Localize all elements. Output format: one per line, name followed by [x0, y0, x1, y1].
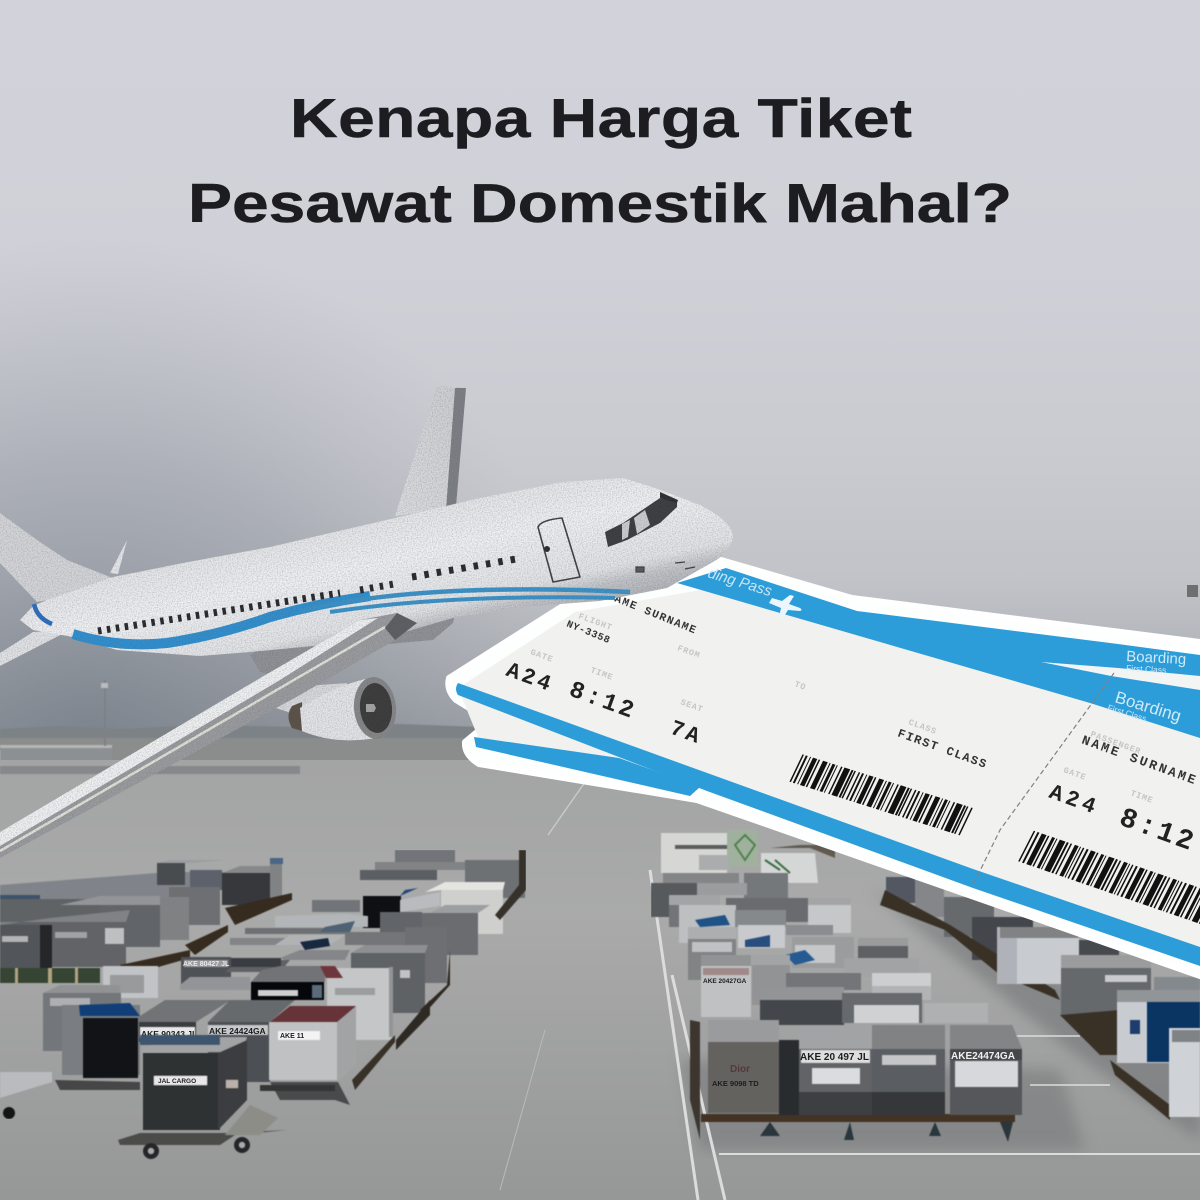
barcode: stub — [1026, 846, 1200, 909]
title: Pesawat Domestik Mahal? — [188, 172, 1012, 234]
main ticket passenger details: CLASS — [907, 717, 938, 737]
stub header text — [1106, 648, 1187, 726]
left container labels: AKE 90343 JL — [141, 1029, 197, 1039]
boarding passes — [448, 560, 1200, 976]
engine — [288, 675, 399, 741]
main ticket passenger details: TIME — [589, 665, 615, 683]
band title: boarding pass: ding Pass — [706, 565, 774, 600]
right container labels: AKE 20 497 JL — [800, 1052, 869, 1063]
right container labels: AKE 20427GA — [703, 978, 747, 985]
background: airport apron — [0, 760, 1200, 1200]
lower stabilizer — [0, 630, 70, 666]
title: Kenapa Harga Tiket — [290, 87, 912, 149]
title — [188, 87, 1012, 234]
passenger windows — [98, 559, 516, 631]
main ticket passenger details — [503, 594, 989, 772]
background: distant horizon and terminal building — [0, 680, 480, 762]
fuselage — [20, 478, 733, 656]
stub passenger details: TIME — [1129, 788, 1155, 806]
stub header text: Boarding — [1126, 648, 1187, 668]
main ticket passenger details: FLIGHT — [577, 611, 614, 633]
ticket sticker outline — [448, 560, 1200, 976]
small rear stabilizer tip — [110, 540, 127, 574]
left container labels: AKE 11 — [280, 1033, 304, 1040]
main ticket bottom band — [456, 683, 1200, 966]
cargo container with JAL Cargo label and cart — [118, 1035, 287, 1159]
left container labels: AKE 80427 JL — [183, 961, 230, 968]
tail cone blue ring — [34, 604, 52, 624]
vertical tail fin — [395, 386, 466, 516]
stub passenger details: A24 — [1046, 780, 1103, 821]
right container labels: Dior — [730, 1064, 750, 1075]
stub passenger details: NAME SURNAME — [1080, 733, 1200, 789]
background: overcast sky — [0, 0, 1200, 750]
main ticket passenger details: FROM — [676, 643, 702, 661]
white wedge of rear ticket — [1041, 662, 1200, 690]
main ticket passenger details: NY-3358 — [565, 620, 611, 647]
stub passenger details: PASSENGER — [1089, 729, 1142, 757]
main ticket passenger details: 8:12 — [565, 677, 640, 726]
JAL Cargo label: JAL CARGO — [158, 1078, 196, 1085]
stub passenger details: 8:12 — [1115, 803, 1200, 860]
perforation line — [973, 673, 1114, 885]
cargo containers: left cluster — [0, 850, 526, 1119]
cockpit windows — [605, 492, 678, 547]
engine pylon — [267, 683, 352, 716]
stub passenger details — [1046, 729, 1200, 860]
cargo containers: right cluster — [651, 830, 1200, 1142]
right container labels: AKE 9098 TD — [712, 1079, 759, 1088]
ticket top blue band — [677, 568, 1200, 738]
rear ticket bottom band — [474, 737, 700, 796]
stub header text: First Class — [1126, 663, 1167, 675]
apron marking lines — [650, 870, 1200, 1200]
main ticket passenger details: GATE — [529, 647, 555, 665]
icon: small plane — [769, 595, 802, 618]
right container labels — [703, 978, 1015, 1088]
rear stabilizer — [0, 513, 125, 602]
main ticket passenger details: SEAT — [679, 697, 705, 715]
barcode: main ticket — [796, 768, 968, 822]
main ticket passenger details: TO — [793, 679, 807, 693]
door window — [544, 546, 550, 552]
main wing — [0, 613, 417, 858]
left container labels — [141, 961, 304, 1040]
left container labels: AKE 24424GA — [209, 1026, 266, 1036]
main ticket passenger details: A24 — [503, 658, 557, 698]
fuselage blue stripe — [73, 589, 630, 644]
ticket body tint — [458, 590, 1200, 965]
airplane — [0, 386, 733, 858]
forward door — [538, 518, 580, 582]
main ticket passenger details: 7A — [667, 716, 706, 751]
main ticket passenger details: FIRST CLASS — [896, 727, 989, 772]
right container labels: AKE24474GA — [951, 1051, 1015, 1062]
wing box under belly — [250, 600, 458, 680]
stub header text: Boarding — [1113, 688, 1183, 726]
nose details — [636, 562, 695, 572]
lamp post at right edge — [1187, 585, 1198, 597]
stub passenger details: GATE — [1062, 765, 1088, 783]
stub header text: First Class — [1106, 702, 1148, 724]
main ticket passenger details: AME SURNAME — [613, 594, 699, 638]
